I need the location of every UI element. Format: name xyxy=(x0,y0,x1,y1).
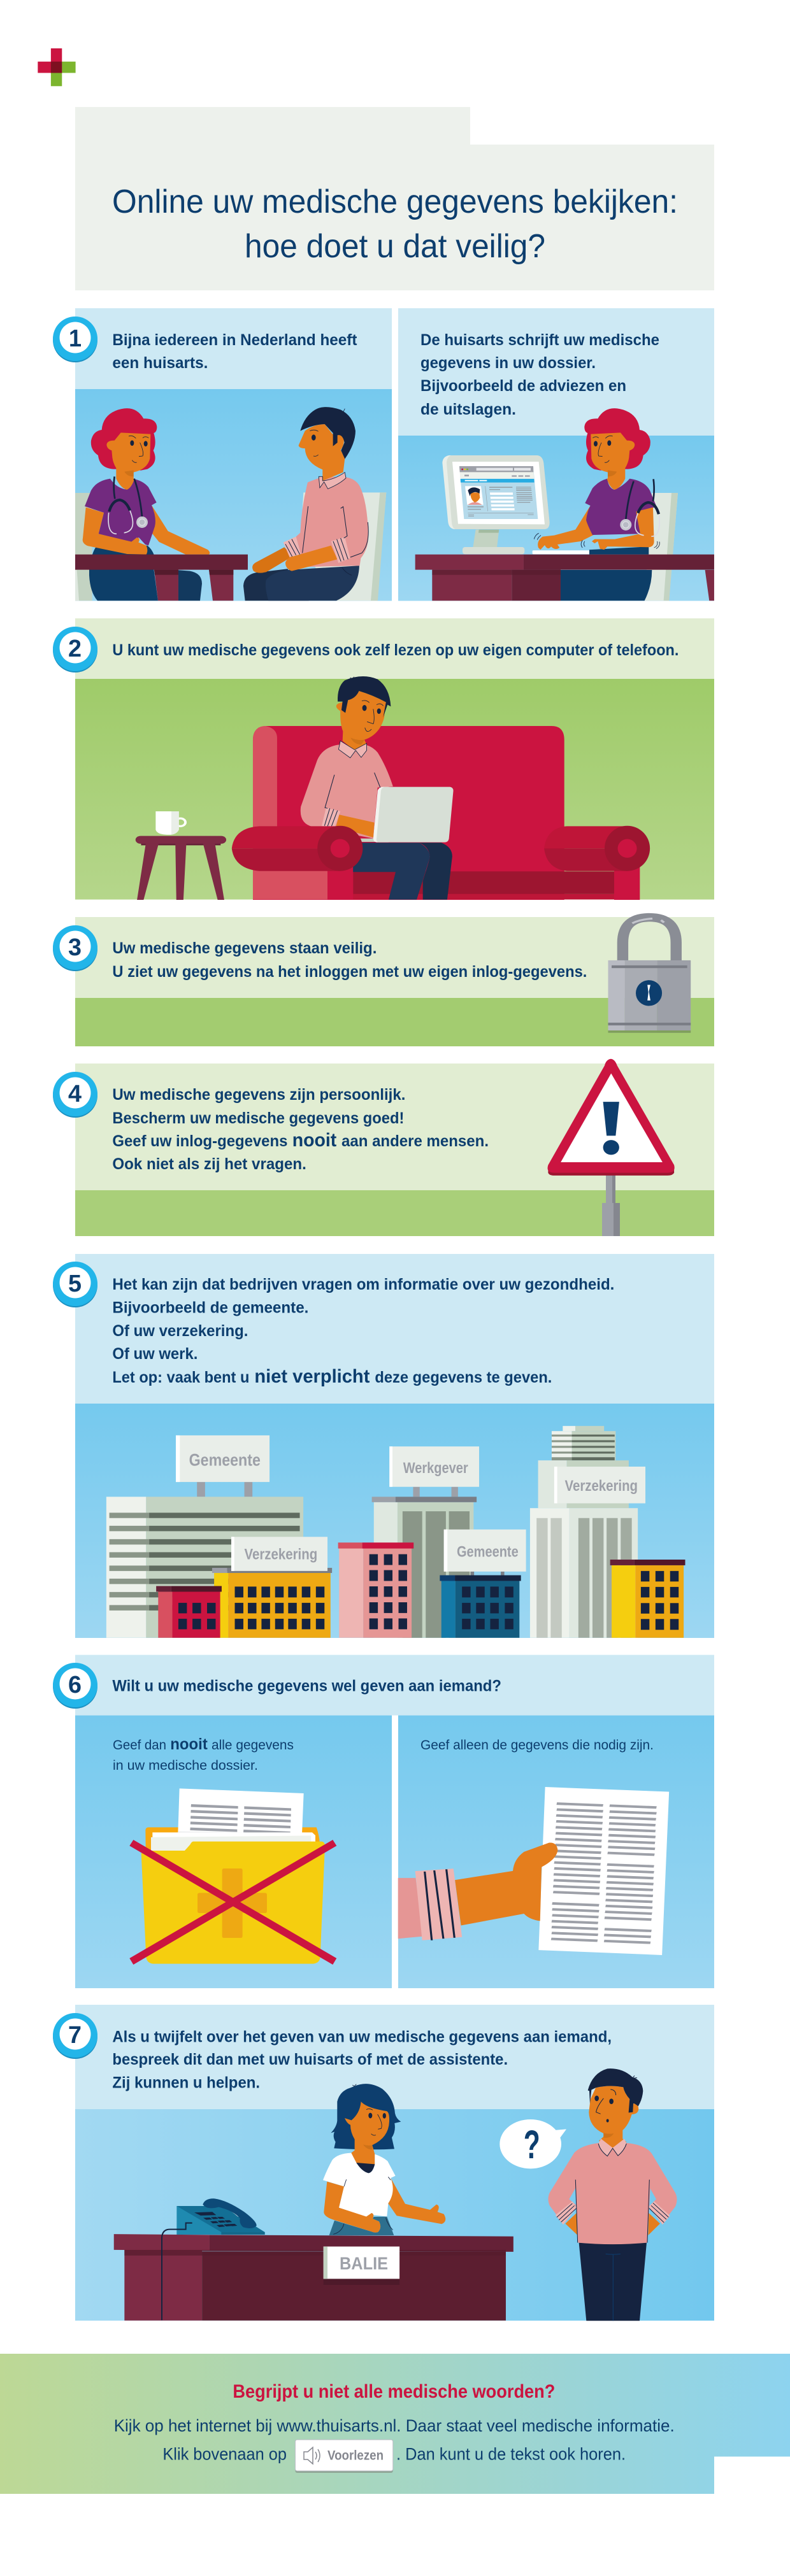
badge: step 5 xyxy=(53,1262,97,1307)
icon: crossed-out folder xyxy=(129,1788,336,1965)
badge: step 1 xyxy=(53,317,97,362)
badge: step 4 xyxy=(53,1072,97,1118)
text: never all data: nooit xyxy=(170,1735,208,1753)
sign labels: Gemeente xyxy=(189,1451,261,1470)
badge: step 1: 1 xyxy=(69,325,82,352)
footer heading: Begrijpt u niet alle medische woorden? xyxy=(233,2381,555,2402)
label: BALIE: BALIE xyxy=(340,2253,388,2274)
building: yellow right xyxy=(610,1560,685,1638)
text: step 5: Het kan zijn dat bedrijven vragen om informatie over uw gezondheid. xyxy=(112,1276,614,1293)
text: step 5: Of uw verzekering. xyxy=(112,1322,248,1340)
panel: step 2 xyxy=(75,618,714,900)
text: step 4: nooit xyxy=(292,1130,336,1151)
text: step 1 right: de uitslagen. xyxy=(420,401,516,418)
panel: step 7 xyxy=(75,2005,714,2321)
button: Voorlezen xyxy=(295,2440,393,2473)
icon: telephone xyxy=(176,2198,265,2235)
speech bubble xyxy=(499,2119,566,2168)
label: question mark: ? xyxy=(524,2123,540,2167)
desk xyxy=(114,2234,514,2321)
text: step 1 right xyxy=(420,331,659,418)
badge: step 3: 3 xyxy=(68,934,82,961)
building: white tower xyxy=(530,1426,645,1638)
text: step 7: Als u twijfelt over het geven van uw medische gegevens aan iemand, xyxy=(112,2028,612,2046)
text: never all data: alle gegevens xyxy=(212,1738,294,1753)
text: step 1 right: Bijvoorbeeld de adviezen en xyxy=(420,377,626,395)
panel: step 1 right xyxy=(398,308,714,601)
icon: warning sign xyxy=(547,1059,675,1236)
text: step 2: U kunt uw medische gegevens ook zelf lezen op uw eigen computer of telefoon. xyxy=(112,641,679,659)
icon: padlock xyxy=(608,918,691,1033)
text: never all data xyxy=(113,1735,294,1773)
panel: footer xyxy=(0,2354,790,2494)
badge: step 2 xyxy=(53,627,97,672)
text: step 4 xyxy=(112,1086,489,1173)
sign labels: Gemeente xyxy=(457,1544,519,1560)
building: werkgever tower xyxy=(372,1446,479,1638)
text: step 7: Zij kunnen u helpen. xyxy=(112,2074,260,2092)
text: step 1 right: De huisarts schrijft uw medische xyxy=(420,331,659,349)
text: step 1 left xyxy=(112,331,357,372)
text: step 3 xyxy=(112,939,587,981)
illustration: city buildings xyxy=(106,1426,685,1638)
building: pink xyxy=(338,1542,413,1638)
text: step 1 right: gegevens in uw dossier. xyxy=(420,354,596,372)
phone cord xyxy=(162,2223,192,2320)
heading: step 6: Wilt u uw medische gegevens wel geven aan iemand? xyxy=(112,1677,501,1695)
building: red xyxy=(156,1586,222,1638)
icon: monitor xyxy=(442,455,550,554)
text: step 1 left: Bijna iedereen in Nederland heeft xyxy=(112,331,357,349)
panel: step 6 xyxy=(75,1655,714,1988)
illustration: doctor and patient xyxy=(75,407,386,601)
badge: step 2: 2 xyxy=(68,636,82,662)
badge: step 5: 5 xyxy=(68,1270,82,1297)
text: step 5: Of uw werk. xyxy=(112,1345,198,1363)
text: never all data: Geef dan xyxy=(113,1738,166,1753)
footer text: Klik bovenaan op xyxy=(162,2445,287,2464)
text: step 7 xyxy=(112,2028,612,2092)
icon: hand holding paper xyxy=(398,1787,669,1955)
footer text: Kijk op het internet bij www.thuisarts.nl. Daar staat veel medische informatie. xyxy=(114,2416,675,2435)
text: step 5: Bijvoorbeeld de gemeente. xyxy=(112,1299,308,1317)
text: never all data: in uw medische dossier. xyxy=(113,1758,258,1773)
text: step 4: aan andere mensen. xyxy=(341,1132,489,1150)
building: stripes left xyxy=(106,1435,303,1638)
title xyxy=(112,183,678,265)
badge: step 3 xyxy=(53,925,97,971)
panel: step 1 left xyxy=(75,308,392,601)
sub-panel: never all data xyxy=(75,1716,392,1988)
text: step 4: Geef uw inlog-gegevens xyxy=(112,1132,287,1150)
panel: step 4 xyxy=(75,1059,714,1236)
text: step 5: deze gegevens te geven. xyxy=(375,1369,552,1386)
title: Online uw medische gegevens bekijken: xyxy=(112,183,678,220)
title: hoe doet u dat veilig? xyxy=(245,228,545,265)
text: step 7: bespreek dit dan met uw huisarts of met de assistente. xyxy=(112,2051,508,2068)
sign labels: Werkgever xyxy=(403,1460,468,1477)
badge: step 7 xyxy=(53,2013,97,2059)
text: only needed data: Geef alleen de gegevens die nodig zijn. xyxy=(420,1738,654,1753)
text: step 1 left: een huisarts. xyxy=(112,354,208,372)
text: step 5: niet verplicht xyxy=(254,1366,370,1387)
badge: step 7: 7 xyxy=(68,2022,82,2049)
illustration: doctor at computer xyxy=(415,408,714,601)
figure: assistant xyxy=(323,2084,445,2235)
sign labels xyxy=(189,1451,638,1563)
sign labels: Verzekering xyxy=(245,1546,317,1563)
button: Voorlezen: Voorlezen xyxy=(327,2449,384,2463)
sub-panel: only needed data xyxy=(398,1716,714,1988)
badge: step 6 xyxy=(53,1663,97,1709)
illustration: sofa table and man with laptop xyxy=(136,676,650,900)
title panel xyxy=(75,107,714,290)
text: step 3: Uw medische gegevens staan veilig. xyxy=(112,939,377,957)
building: teal xyxy=(440,1530,526,1638)
logo: cross xyxy=(38,48,76,86)
text: step 4: Uw medische gegevens zijn persoonlijk. xyxy=(112,1086,405,1104)
figure: patient xyxy=(548,2068,677,2321)
text: step 3: U ziet uw gegevens na het inloggen met uw eigen inlog-gegevens. xyxy=(112,963,587,981)
text: step 5: Let op: vaak bent u xyxy=(112,1369,249,1386)
text: step 4: Ook niet als zij het vragen. xyxy=(112,1155,306,1173)
footer text xyxy=(114,2416,675,2464)
text: step 5 xyxy=(112,1276,614,1387)
badge: step 6: 6 xyxy=(68,1672,82,1698)
panel: step 5 xyxy=(75,1254,714,1638)
text: step 4: Bescherm uw medische gegevens goed! xyxy=(112,1109,404,1127)
badge: step 4: 4 xyxy=(68,1081,82,1107)
footer text: . Dan kunt u de tekst ook horen. xyxy=(396,2445,626,2464)
building: yellow xyxy=(212,1537,332,1638)
panel: step 3 xyxy=(75,917,714,1046)
sign labels: Verzekering xyxy=(564,1477,638,1495)
